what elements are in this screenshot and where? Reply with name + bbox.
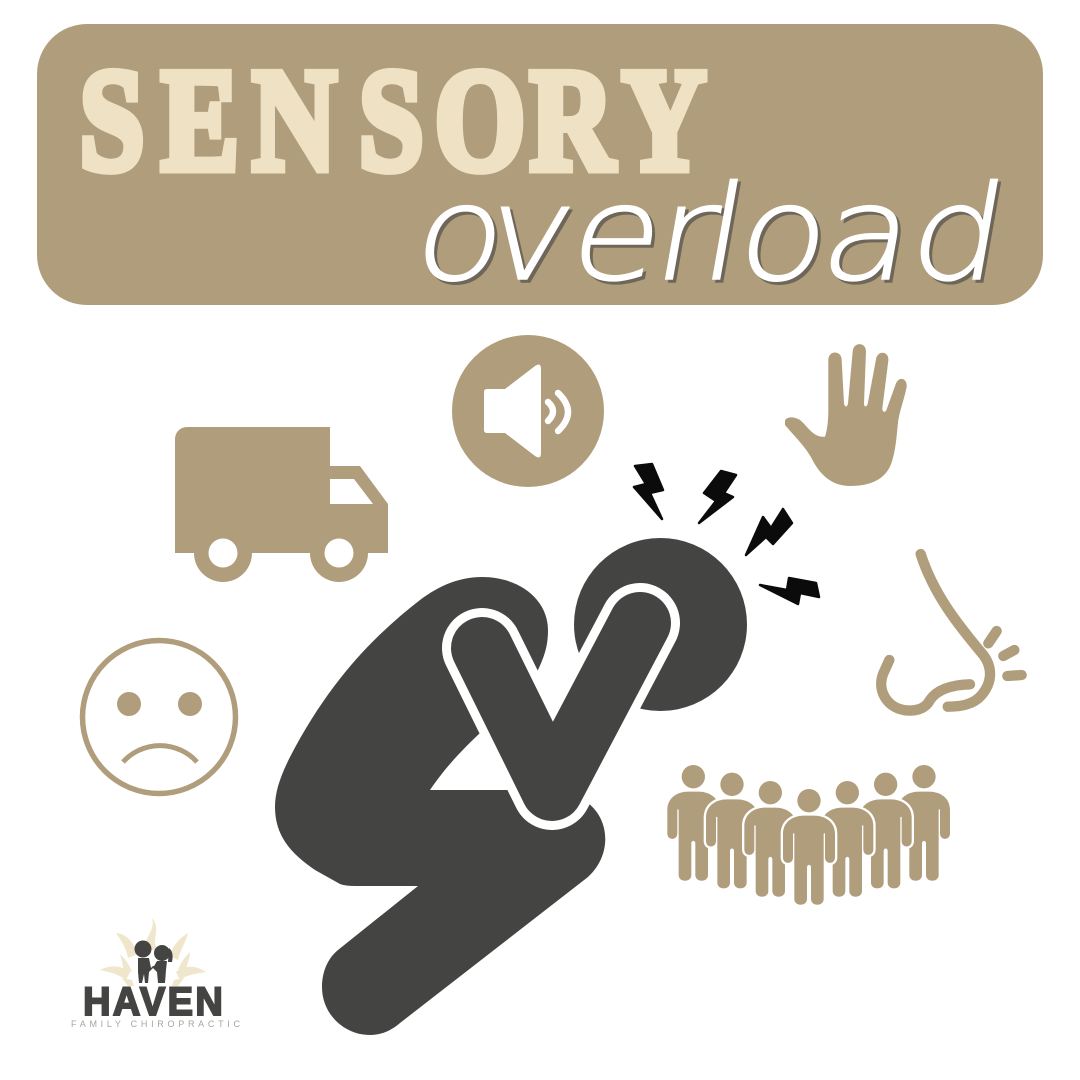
logo sun rays (100, 918, 206, 986)
icon: sad face (82, 640, 236, 794)
figure body and leg (275, 577, 605, 1035)
icon: crowd of people (667, 765, 950, 905)
logo children silhouettes (134, 940, 173, 983)
figure arms (482, 623, 640, 790)
icon: hand (785, 344, 907, 486)
figure head (574, 538, 747, 711)
icon: nose (881, 554, 1022, 711)
title banner (37, 24, 1043, 313)
icon: lightning bolts (634, 464, 819, 604)
icon: delivery truck (175, 427, 388, 582)
heading: overload: overload (404, 157, 1018, 310)
logo: Haven Family Chiropractic (71, 918, 241, 1029)
figure: person curled up holding head (275, 538, 747, 1035)
logo wordmark: HAVEN (83, 980, 223, 1024)
heading: overload: overload (407, 160, 1021, 313)
icon: speaker (452, 335, 604, 487)
heading: SENSORY: SENSORY (80, 39, 706, 201)
logo tagline: FAMILY CHIROPRACTIC (71, 1019, 241, 1029)
